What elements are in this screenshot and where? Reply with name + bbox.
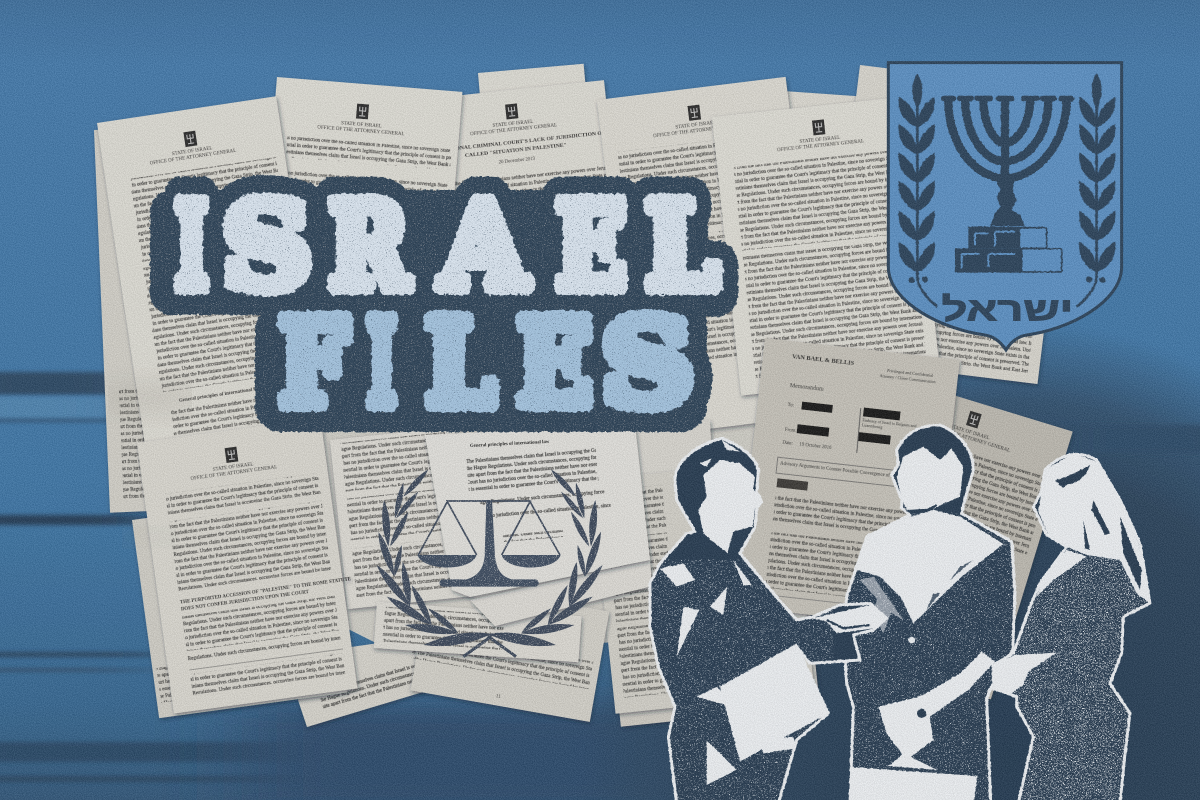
paper: document, upper right: OFFICE OF THE ATTORNEY GENERAL [777,139,864,153]
memo: Van Bael & Bellis memorandum: Memorandum [789,383,824,393]
title: ISRAEL FILES lettering: S [223,178,311,315]
memo: Van Bael & Bellis memorandum: Advisory Arguments to Counter Possible Convergence of [780,461,890,479]
memo: Van Bael & Bellis memorandum: VAN BAEL & BELLIS [792,353,855,367]
paper: bottom tilted sheet [298,640,445,727]
paper: document, upper right of centre: STATE OF ISRAEL [675,121,717,131]
paper: document, upper centre [250,77,462,431]
paper: small strip below centre [374,602,582,662]
title: ISRAEL FILES lettering: E [517,296,592,432]
title: ISRAEL FILES lettering: E [556,177,626,315]
paper: lower-left front document: STATE OF ISRAEL [213,462,254,473]
paper: document with jurisdiction heading [415,77,664,408]
paper: document, upper right of centre [597,77,827,437]
paper: document, lower right behind figures: STATE OF ISRAEL [949,425,990,441]
paper: document with jurisdiction heading: OFFICE OF THE ATTORNEY GENERAL [470,123,557,137]
paper: document, upper right: STATE OF ISRAEL [799,136,841,145]
menorah [944,98,1071,183]
menorah base and blocks [955,178,1062,273]
paper: lower centre sheet: 11 [495,694,501,700]
paper: document with jurisdiction heading: 20 December 2019 [499,157,536,166]
memo: Van Bael & Bellis memorandum: Privileged and Confidential [887,368,934,378]
title: ISRAEL FILES lettering: F [279,295,348,432]
paper: document, upper right of centre: OFFICE OF THE ATTORNEY GENERAL [653,124,740,139]
memo: Van Bael & Bellis memorandum: To: [787,403,794,409]
paper: sheet under lower-left document [132,494,347,718]
memo: Van Bael & Bellis memorandum: Attorney / Client Communication [879,373,937,384]
paper: document, upper centre: STATE OF ISRAEL [341,121,382,130]
paper: lower left text sheet [330,427,472,609]
paper: document, upper centre: OFFICE OF THE ATTORNEY GENERAL [317,125,405,137]
paper: centre tilted under-sheet [470,560,652,626]
olive branches [898,73,1115,307]
paper: document, upper left: STATE OF ISRAEL [172,146,213,157]
title: ISRAEL FILES lettering: R [329,179,410,315]
paper: lower-left front document: OFFICE OF THE ATTORNEY GENERAL [190,465,278,482]
title: ISRAEL FILES lettering: L [646,178,718,315]
paper: document, lower right behind figures [809,376,1073,699]
title: ISRAEL FILES lettering: L [426,296,495,432]
paper: centre sheet, international law [425,425,650,597]
figure: right woman [990,453,1157,800]
figures: three people in conversation [647,425,1157,800]
memo: Van Bael & Bellis memorandum: Luxembourg [862,422,883,430]
paper smudges [120,388,180,541]
paper: document, upper left [97,96,325,449]
memo: Van Bael & Bellis memorandum: Embassy of Israel to Belgium and [862,417,917,428]
paper stack: back sheets, top right and top centre [478,64,906,159]
memo: Van Bael & Bellis memorandum [735,338,960,628]
memo: Van Bael & Bellis memorandum: From: [785,428,797,434]
title: ISRAEL FILES lettering: I [367,296,397,433]
figure: left woman with folder [647,438,887,800]
paper: document with jurisdiction heading: CALLED "SITUATION IN PALESTINE" [465,142,567,159]
paper: centre sheet, international law: General principles of international law [470,440,550,449]
paper: document, upper right [712,96,940,395]
paper: far-left back sheet [94,122,290,513]
paper: lower-left front document [137,417,366,713]
title: ISRAEL FILES lettering: S [602,294,693,432]
paper: backing fill behind centre and right stacks [320,350,775,705]
memo: Van Bael & Bellis memorandum: Date: [782,441,793,447]
paper: columns right of centre [591,420,820,727]
paper: document under the Israeli emblem [824,65,1073,384]
paper: lower centre sheet [406,579,609,722]
shield body [888,63,1122,350]
title: ISRAEL FILES lettering: I [175,177,208,315]
paper: lower-left front document: DOES NOT CONFER JURISDICTION UPON THE COURT [181,590,310,613]
paper: lower-left front document: THE PURPORTED ACCESSION OF "PALESTINE" TO THE ROME STATUTE [180,577,352,606]
memo: Van Bael & Bellis memorandum: 19 October 2016 [799,443,832,451]
title: ISRAEL FILES lettering [150,177,738,433]
paper: document, upper left: OFFICE OF THE ATTORNEY GENERAL [150,149,237,167]
figure: centre man [840,425,1020,800]
paper: document with jurisdiction heading: INTERNATIONAL CRIMINAL COURT'S LACK OF JURISDICTION OVER THE SO- [424,127,638,155]
emblem: International Criminal Court scales and wreath [377,469,603,657]
title: ISRAEL FILES lettering: A [440,177,528,315]
Hebrew inscription: ישראל [942,292,1073,329]
paper: document with jurisdiction heading: STATE OF ISRAEL [492,120,534,129]
emblem: Israeli state shield with menorah [888,63,1122,350]
paper: document, lower right behind figures: OFFICE OF THE ATTORNEY GENERAL [925,424,1011,454]
paper: document, upper left: General principles of international law [179,387,262,404]
